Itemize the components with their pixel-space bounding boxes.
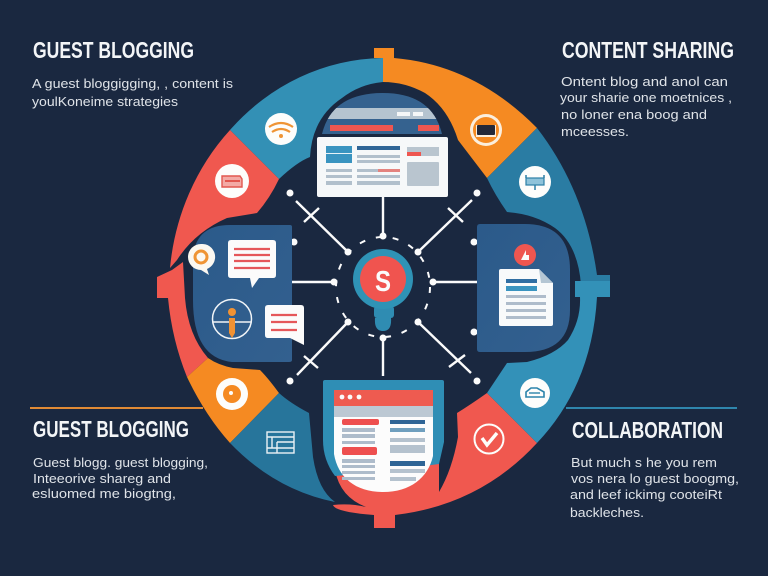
icon: red badge <box>514 244 536 266</box>
shield background <box>323 380 444 476</box>
left panel background <box>193 225 292 362</box>
segment: lower left orange <box>187 358 279 443</box>
icon: orange screen <box>470 114 502 146</box>
panel: guest blogging top left <box>32 37 233 109</box>
segment: left red bracket <box>157 262 208 377</box>
panel: top browser card <box>317 90 448 197</box>
icon: location bubble <box>188 244 215 275</box>
segment: bottom red <box>333 393 537 515</box>
text block: lower guest blogging description: esluomed me biogtng, <box>32 487 176 501</box>
panel: guest blogging bottom left <box>30 407 208 501</box>
text block: guest blogging description <box>32 77 233 109</box>
icon: layout outline <box>267 432 294 453</box>
text block: content sharing description: Ontent blog and anol can <box>561 75 728 89</box>
heading: guest blogging lower: GUEST BLOGGING <box>33 416 189 442</box>
segment: right lower blue <box>487 281 610 443</box>
panel: bottom browser shield <box>323 380 444 494</box>
heading: collaboration: COLLABORATION <box>572 417 723 443</box>
text block: guest blogging description: A guest bloggigging, , content is <box>32 77 233 91</box>
icon: orange target <box>216 378 248 410</box>
text block: lower guest blogging description: Guest blogg. guest blogging, <box>33 456 208 470</box>
hub: central S bulb <box>353 249 413 331</box>
icon: document <box>499 269 553 326</box>
segment: left red <box>170 130 279 268</box>
text block: lower guest blogging description: Inteeorive shareg and <box>33 472 171 486</box>
icon: check mark <box>474 424 504 454</box>
browser sheet <box>334 390 433 494</box>
chart: segmented ring <box>157 48 610 528</box>
text block: collaboration description: vos nera lo guest boogmg, <box>571 472 739 486</box>
text block: collaboration description: backleches. <box>570 506 644 520</box>
segment: lower left blue <box>230 393 335 502</box>
hub: central S bulb: S <box>375 266 391 298</box>
icon: wifi <box>265 113 297 145</box>
icon: car <box>520 378 550 408</box>
panel: left chat <box>188 225 304 362</box>
icon: person in circle <box>212 300 252 338</box>
segment: top orange <box>374 48 537 178</box>
text block: content sharing description: no loner ena boog and <box>561 108 707 122</box>
text block: guest blogging description: youlKoneime strategies <box>32 95 178 109</box>
text block: collaboration description: and leef ickimg cooteiRt <box>570 488 723 502</box>
text block: collaboration description <box>570 456 739 520</box>
icon: red banner <box>215 164 249 198</box>
browser content card <box>317 137 448 197</box>
connectors: hub network <box>286 190 480 384</box>
text block: collaboration description: But much s he you rem <box>571 456 717 470</box>
panel: right document <box>477 224 570 352</box>
segment: right upper blue <box>487 128 610 285</box>
text block: content sharing description <box>560 75 732 139</box>
browser dome <box>322 93 442 134</box>
heading: guest blogging: GUEST BLOGGING <box>33 37 194 63</box>
text block: content sharing description: mceesses. <box>561 125 629 139</box>
text block: content sharing description: your sharie one moetnices , <box>560 91 732 105</box>
icon: blue bed <box>519 166 551 198</box>
right article rows <box>390 420 425 481</box>
panel: content sharing top right <box>560 37 734 139</box>
text block: lower guest blogging description <box>32 456 208 501</box>
segment: top left blue <box>230 58 383 179</box>
right panel background <box>477 224 570 352</box>
left article rows <box>342 419 379 480</box>
icon: small chat bubble <box>265 305 304 345</box>
icon: chat bubble <box>228 240 276 288</box>
panel: collaboration bottom right <box>566 407 739 520</box>
